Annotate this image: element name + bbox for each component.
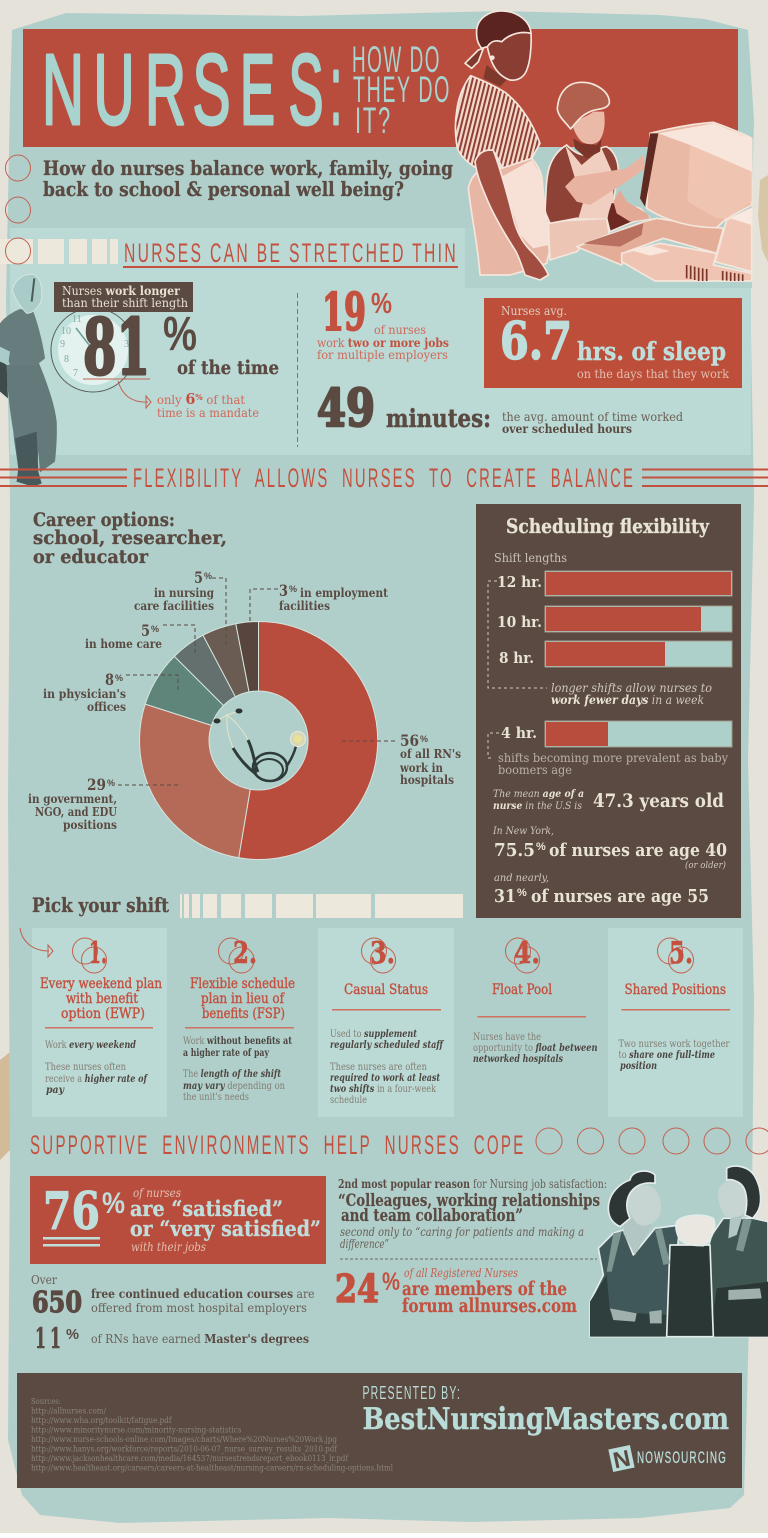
stat: 49 minutes: the avg. amount of time worked [502, 410, 683, 424]
sources: http://www.wha.org/toolkit/fatigue.pdf [31, 1416, 172, 1426]
stat: two or more jobs: % [371, 288, 392, 320]
card text: networked hospitals [473, 1053, 563, 1065]
stat: education courses: 650 [32, 1285, 82, 1319]
bar: 10 hr [497, 606, 732, 632]
sources: http://www.hanys.org/workforce/reports/2010-06-07_nurse_survey_results_2010.pdf [31, 1444, 338, 1454]
left ring markers [6, 155, 30, 264]
sources: http://www.jacksonhealthcare.com/media/164537/nursestrendsreport_ebook0113_lr.pdf [31, 1454, 349, 1464]
card text [618, 1038, 730, 1072]
sources: http://www.nurse-schools-online.com/Images/charts/Where%20Nurses%20Work.jpg [31, 1435, 337, 1445]
stat box: job satisfaction: of nurses [133, 1186, 181, 1200]
stat: education courses: free continued education courses are [91, 1287, 314, 1301]
card text: Two nurses work together [618, 1038, 730, 1050]
label: employment: % [289, 584, 297, 594]
stat: two or more jobs: of nurses [374, 323, 426, 337]
label: government: % [107, 778, 115, 788]
panel: scheduling flexibility [476, 504, 741, 918]
sources: Sources: [31, 1397, 61, 1407]
stat box: job satisfaction: 76 [43, 1182, 100, 1242]
label: physician [43, 670, 178, 714]
stat: allnurses forum: of all Registered Nurses [404, 1266, 518, 1280]
label: hospitals: 56 [400, 731, 419, 750]
card text: receive a higher rate of [45, 1073, 149, 1085]
heading: pick your shift [32, 893, 463, 918]
card text [473, 1031, 598, 1065]
81 percent: 81 [83, 303, 150, 393]
text: colleagues quote: and team collaboration” [341, 1206, 523, 1226]
icon: stethoscope [214, 708, 306, 781]
stat: two or more jobs: work two or more jobs [317, 336, 449, 350]
note: longer shifts [488, 581, 712, 707]
bar: 12 hr [497, 571, 732, 596]
card text [45, 1039, 149, 1096]
label: hospitals: work in [399, 761, 443, 775]
bar: 8 hr: 8 hr. [499, 649, 534, 667]
fact: age 55: and nearly, [494, 872, 549, 884]
card text: Work every weekend [45, 1039, 137, 1051]
title: NURSES: S [192, 34, 230, 146]
stat: 49 minutes: over scheduled hours [502, 422, 632, 436]
clock graphic [51, 308, 135, 392]
number badge: 1. [89, 936, 107, 971]
card title: option (EWP) [61, 1006, 145, 1022]
card text: pay [46, 1084, 65, 1096]
card 5: shared positions [608, 928, 743, 1117]
stat box: hours of sleep [484, 298, 742, 388]
text: colleagues quote: “Colleagues, working relationships [338, 1191, 600, 1211]
mandate note: only 6 [157, 390, 196, 408]
fact: age 55 [494, 872, 709, 907]
fact: mean age: The mean age of a [493, 788, 584, 800]
label: hospitals: of all RN's [400, 747, 461, 761]
label: government: positions [63, 818, 117, 832]
card text: schedule [330, 1094, 367, 1106]
logo: nowsourcing: N [611, 1445, 633, 1473]
label: nursing care: % [204, 571, 212, 581]
card text: The length of the shift [183, 1068, 281, 1080]
label: employment [250, 581, 388, 621]
stat: two or more jobs: 19 [322, 283, 366, 343]
number badge: 3. [370, 936, 395, 971]
title: how do they do it: HOW DO [352, 39, 441, 80]
fact: new york: of nurses are age 40 [549, 840, 727, 861]
card title: with benefit [66, 991, 138, 1007]
label box: than their shift length [62, 296, 188, 310]
card text: a higher rate of pay [183, 1047, 270, 1059]
label: physician: in physician's [43, 687, 126, 701]
card 3: casual status [318, 928, 454, 1117]
heading: pick your shift: Pick your shift [32, 893, 170, 917]
stat: masters degrees: 1 [35, 1322, 46, 1355]
label: physician: offices [87, 700, 126, 714]
bar: 4 hr [501, 721, 732, 747]
label: employment: in employment [300, 586, 388, 600]
decorative cream squares [0, 239, 118, 264]
clock graphic: 9 [60, 339, 65, 350]
note: longer shifts: work fewer days in a week [551, 693, 704, 707]
stat box: job satisfaction [30, 1176, 326, 1264]
card text: These nurses are often [330, 1061, 427, 1073]
bar: 4 hr: 4 hr. [501, 724, 537, 742]
stat: masters degrees: of RNs have earned Master's degrees [91, 1332, 309, 1346]
fact: age 55: of nurses are age 55 [531, 886, 709, 907]
label: employment: facilities [279, 599, 330, 613]
fact: new york: (or older) [685, 860, 726, 871]
label: government: in government, [28, 792, 117, 806]
title: NURSES: U [94, 34, 134, 146]
stat: masters degrees: % [66, 1326, 79, 1343]
clock graphic: 7 [73, 368, 78, 379]
section heading: stretched thin: NURSES CAN BE STRETCHED THIN [124, 238, 458, 268]
card text: regularly scheduled staff [330, 1039, 445, 1051]
career options heading [33, 509, 227, 568]
stat box: job satisfaction: with their jobs [131, 1240, 206, 1254]
career options heading: school, researcher, [33, 527, 227, 549]
stat box: hours of sleep: hrs. of sleep [577, 337, 726, 366]
stat: two or more jobs: for multiple employers [317, 348, 448, 362]
figure: standing nurse [0, 274, 57, 487]
text: colleagues quote: second only to “caring for patients and making a [340, 1225, 584, 1239]
label: government [28, 775, 178, 832]
card text: may vary depending on [183, 1080, 285, 1092]
arrow to shift cards [20, 928, 53, 957]
sources: http://www.healtheast.org/careers/careers-at-healtheast/nursing-careers/rn-scheduling-options.html [31, 1464, 393, 1474]
card text: Work without benefits at [183, 1035, 292, 1047]
title: NURSES [42, 34, 342, 146]
mandate note [157, 390, 259, 420]
stat: allnurses forum: are members of the [402, 1278, 567, 1300]
label: hospitals: hospitals [400, 773, 454, 787]
fact: new york: % [536, 841, 546, 853]
stat: allnurses forum: forum allnurses.com [402, 1295, 577, 1317]
card title: Shared Positions [624, 982, 726, 998]
label: government: 29 [87, 775, 106, 794]
card text: opportunity to float between [473, 1042, 598, 1054]
number badge [658, 936, 694, 973]
career options heading: Career options: [33, 509, 175, 531]
card title [190, 976, 295, 1022]
title banner [23, 29, 738, 147]
number badge: 5. [669, 936, 693, 971]
donut labels [28, 568, 461, 832]
slice: physician 8 [145, 656, 224, 725]
footer panel [17, 1373, 742, 1488]
card 4: float pool [473, 936, 598, 1065]
label: hospitals: % [420, 734, 428, 744]
title: NURSES: R [145, 34, 186, 146]
stat: education courses: Over [31, 1273, 57, 1287]
photo: nurses at computer [455, 11, 752, 281]
panel heading: Scheduling flexibility [506, 514, 710, 538]
clock graphic: 10 [61, 326, 71, 337]
bar: 10 hr: 10 hr. [497, 613, 542, 631]
subtitle question: How do nurses balance work, family, going [43, 156, 453, 180]
card title: Casual Status [344, 982, 428, 998]
card text: to share one full-time [618, 1049, 715, 1061]
stat: work longer than shift: % [163, 308, 197, 361]
slice: nursing care 5 [203, 624, 249, 697]
sources [31, 1397, 393, 1474]
label: government: NGO, and EDU [35, 805, 117, 819]
label: employment: 3 [279, 581, 288, 600]
bar: 8 hr [499, 641, 732, 667]
note: baby boomers [488, 733, 728, 777]
stat box: hours of sleep: on the days that they work [577, 367, 730, 381]
label: nursing care: in nursing [154, 586, 215, 600]
label: home care: in home care [85, 637, 162, 651]
bar: 12 hr: 12 hr. [497, 573, 542, 591]
card text [330, 1028, 445, 1106]
shift lengths label: Shift lengths [494, 551, 567, 565]
label: home care [85, 621, 195, 653]
fact: mean age: nurse in the U.S is [493, 800, 583, 812]
clock graphic: 3 [124, 339, 129, 350]
note: longer shifts: longer shifts allow nurses to [551, 681, 712, 695]
stat: two or more jobs [317, 283, 449, 362]
card text: position [620, 1060, 657, 1072]
note: baby boomers: boomers age [498, 763, 572, 777]
subtitle question [43, 156, 453, 201]
nurse one [455, 11, 549, 280]
label: hospitals [342, 731, 461, 787]
label: nursing care: care facilities [134, 599, 214, 613]
card title: Float Pool [492, 982, 552, 998]
label: nursing care: 5 [194, 568, 203, 587]
card text: the unit's needs [183, 1091, 249, 1103]
sources: http://allnurses.com/ [31, 1406, 106, 1416]
stat: 49 minutes: minutes: [386, 404, 491, 433]
fact: new york: In New York, [492, 825, 554, 837]
fact: age 55: % [517, 887, 527, 899]
card text: required to work at least [330, 1072, 440, 1084]
stat: masters degrees: 1 [50, 1322, 61, 1355]
stat box: hours of sleep: 6.7 [500, 312, 572, 372]
card 2: flexible schedule [183, 936, 295, 1103]
slice: home care 5 [174, 635, 235, 706]
card text: Used to supplement [330, 1028, 417, 1040]
card title: Flexible schedule [190, 976, 295, 992]
label: home care: % [151, 624, 159, 634]
stat: education courses: offered from most hospital employers [91, 1301, 307, 1315]
presented by: PRESENTED BY: [362, 1383, 461, 1403]
nurse left [590, 1171, 762, 1337]
card title: benefits (FSP) [202, 1006, 285, 1022]
number badge [362, 936, 396, 973]
mandate note: % [195, 392, 203, 402]
stat box: hours of sleep: Nurses avg. [501, 304, 567, 318]
stat: masters degrees [35, 1322, 309, 1355]
photo: two nurses [590, 1166, 768, 1337]
donut chart [140, 621, 378, 859]
card title [40, 976, 162, 1022]
arrow to mandate note [118, 381, 151, 408]
card text: These nurses often [45, 1061, 126, 1073]
stat: work longer than shift [54, 282, 279, 393]
mandate note: time is a mandate [157, 406, 259, 420]
label: physician: % [115, 673, 123, 683]
number badge: 4. [514, 936, 540, 971]
stat: 49 minutes: 49 [317, 379, 375, 439]
card text [183, 1035, 292, 1103]
title: how do they do it: THEY DO [353, 69, 451, 110]
card title: plan in lieu of [201, 991, 286, 1007]
text: colleagues quote: 2nd most popular reason for Nursing job satisfaction: [338, 1177, 607, 1191]
title: NURSES: N [42, 34, 84, 146]
title banner: : [330, 34, 342, 146]
stat box: job satisfaction: % [102, 1187, 125, 1220]
fact: age 55: 31 [494, 886, 516, 907]
stat: work longer than shift: of the time [177, 357, 279, 379]
title: NURSES: S [288, 34, 324, 146]
fact: mean age [493, 788, 724, 812]
title: how do they do it [352, 39, 451, 141]
stat box: job satisfaction: or “very satisfied” [130, 1216, 321, 1241]
card title: Every weekend plan [40, 976, 162, 992]
slice: employment 3 [236, 622, 258, 692]
logo: nowsourcing [608, 1444, 727, 1474]
title: how do they do it: IT? [355, 100, 392, 141]
text: colleagues quote [338, 1177, 607, 1259]
mandate note: of that [203, 393, 245, 407]
label: physician: 8 [105, 670, 114, 689]
label: home care: 5 [141, 621, 150, 640]
label: nursing care [134, 568, 226, 645]
number badge [72, 936, 107, 973]
nurse right [703, 1166, 768, 1337]
fact: new york: 75.5 [494, 840, 535, 861]
fact: mean age: 47.3 years old [593, 790, 724, 812]
label box: Nurses work longer [62, 284, 181, 298]
stat box: job satisfaction: are “satisfied” [130, 1196, 283, 1221]
card text: two shifts in a four-week [330, 1083, 436, 1095]
stat: allnurses forum: 24 [335, 1266, 379, 1311]
text: colleagues quote: difference” [340, 1237, 389, 1251]
career options heading: or educator [33, 546, 149, 568]
clock graphic: 11 [72, 314, 82, 325]
sources: http://www.minoritynurse.com/minority-nursing-statistics [31, 1426, 242, 1436]
fact: new york [492, 825, 727, 871]
stat: 49 minutes [317, 379, 683, 439]
card 1: every weekend [32, 928, 167, 1117]
stat: allnurses forum [335, 1266, 577, 1317]
subtitle question: back to school & personal well being? [43, 177, 404, 201]
slice: government 29 [140, 704, 250, 858]
note: baby boomers: shifts becoming more prevalent as baby [498, 751, 728, 765]
label box [54, 282, 193, 312]
slice: hospitals 56 [239, 621, 378, 859]
nurse two and computer [545, 82, 752, 281]
card text: Nurses have the [473, 1031, 541, 1043]
clock graphic: 8 [64, 354, 69, 365]
number badge [218, 936, 257, 973]
stat: allnurses forum: % [382, 1268, 400, 1296]
stat: education courses [31, 1273, 314, 1319]
title: NURSES: E [240, 34, 275, 146]
number badge: 2. [233, 936, 257, 971]
